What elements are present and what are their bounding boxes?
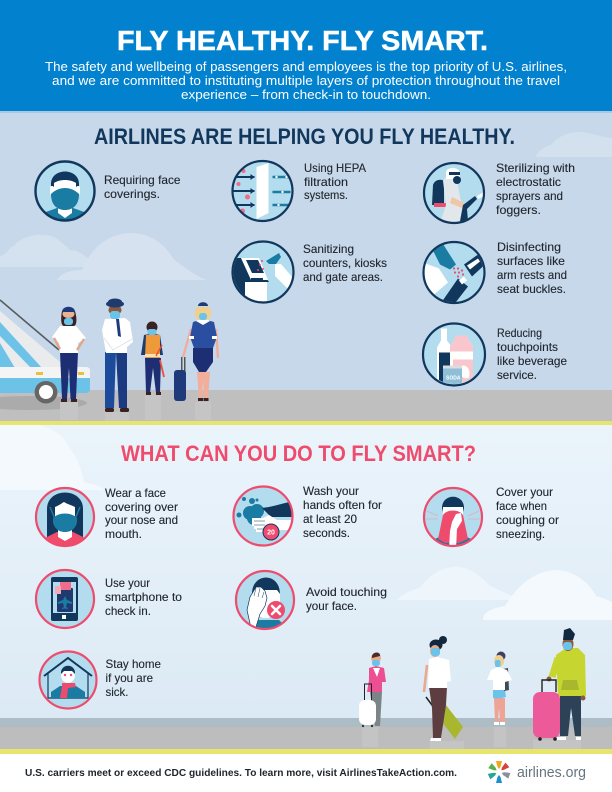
text: cover your face: Cover your: [496, 485, 553, 499]
icon: sanitizing kiosk: [232, 242, 294, 304]
icon: wash hands: [232, 486, 294, 546]
text: stay home: [106, 657, 161, 699]
icon: beverage service: SODA: [446, 376, 461, 382]
text: sanitizing: Sanitizing: [303, 242, 354, 256]
text: smartphone: smartphone to: [105, 590, 182, 604]
text: sterilizing: electrostatic: [496, 175, 561, 189]
text: stay home: Stay home: [106, 657, 161, 671]
text: sanitizing: and gate areas.: [303, 270, 383, 284]
heading: fly smart: WHAT CAN YOU DO TO FLY SMART?: [121, 441, 476, 466]
text: reducing: Reducing: [497, 326, 542, 340]
text: sanitizing: [303, 242, 387, 284]
text: reducing: service.: [497, 368, 537, 382]
text: reducing: touchpoints: [497, 340, 558, 354]
intro text: The safety and wellbeing of passengers and employees is the top priority of U.S. airlines,: [45, 59, 567, 74]
text: disinfecting: seat buckles.: [497, 282, 566, 296]
text: wash hands: at least 20: [303, 512, 357, 526]
text: wash hands: Wash your: [303, 484, 359, 498]
text: wear a face covering: mouth.: [105, 527, 142, 541]
text: smartphone: check in.: [105, 604, 151, 618]
text: wear a face covering: your nose and: [105, 513, 178, 527]
text: cover your face: coughing or: [496, 513, 559, 527]
panel: header: [0, 0, 612, 111]
person: male pilot: [102, 298, 133, 421]
text: HEPA: filtration: [304, 175, 348, 189]
person: flight attendant with suitcase: [174, 302, 218, 420]
text: wear a face covering: covering over: [105, 500, 178, 514]
person: female pilot: [52, 307, 86, 420]
text: disinfecting: Disinfecting: [497, 240, 561, 254]
badge: x mark: [267, 601, 285, 619]
panel: what you can do section background: [0, 425, 612, 754]
logo: airlines.org mark: [488, 761, 510, 783]
text: reducing: like beverage: [497, 354, 567, 368]
text: disinfecting: [497, 240, 567, 296]
text: sterilizing: foggers.: [496, 203, 541, 217]
text: requiring face coverings: coverings.: [104, 187, 160, 201]
text: wash hands: seconds.: [303, 526, 350, 540]
icon: stay home: [38, 650, 98, 710]
text: HEPA: Using HEPA: [304, 161, 366, 175]
text: cover your face: [496, 485, 559, 541]
icon: disinfecting seat buckle: [423, 242, 488, 304]
icon: wear face covering: [35, 487, 95, 549]
intro text: and we are committed to instituting multiple layers of protection throughout the travel: [52, 73, 560, 88]
icon: avoid touching face: [235, 570, 295, 632]
badge: 20 seconds: 20: [267, 530, 275, 536]
text: avoid touching: your face.: [306, 599, 357, 613]
intro text: experience – from check-in to touchdown.: [181, 87, 431, 102]
text: requiring face coverings: [104, 173, 181, 201]
text: sterilizing: sprayers and: [496, 189, 563, 203]
icon: beverage service: [423, 324, 485, 386]
icon: HEPA filter: [232, 161, 292, 221]
text: disinfecting: surfaces like: [497, 254, 565, 268]
logo: airlines.org wordmark: airlines.org: [517, 764, 586, 781]
intro text: [45, 59, 567, 102]
text: sanitizing: counters, kiosks: [303, 256, 387, 270]
text: disinfecting: arm rests and: [497, 268, 567, 282]
panel: airlines section background: [0, 111, 612, 425]
heading: airlines: AIRLINES ARE HELPING YOU FLY HEALTHY.: [94, 124, 515, 149]
text: reducing: [497, 326, 567, 382]
text: wear a face covering: [105, 486, 178, 541]
icon: smartphone check-in: [35, 569, 95, 629]
panel: footer: [0, 754, 612, 792]
person: boy with white suitcase: [359, 652, 386, 747]
icon: electrostatic sprayer: [424, 163, 486, 223]
person: girl with backpack: [487, 652, 512, 747]
text: avoid touching: Avoid touching: [306, 585, 387, 599]
icon: face covering: [35, 162, 95, 221]
text: smartphone: Use your: [105, 576, 150, 590]
footer text: U.S. carriers meet or exceed CDC guidelines. To learn more, visit AirlinesTakeAction.com.: [25, 767, 457, 779]
text: cover your face: face when: [496, 499, 547, 513]
text: avoid touching: [306, 585, 387, 613]
icon: cover cough: [423, 487, 483, 549]
text: HEPA: systems.: [304, 188, 348, 202]
title: FLY HEALTHY. FLY SMART.: [117, 25, 488, 56]
text: requiring face coverings: Requiring face: [104, 173, 181, 187]
text: sterilizing: [496, 161, 575, 217]
text: smartphone: [105, 576, 182, 618]
person: woman with green suitcase: [424, 636, 464, 749]
person: ground crew with vest: [141, 322, 164, 420]
text: sterilizing: Sterilizing with: [496, 161, 575, 175]
text: wash hands: [303, 484, 382, 540]
text: stay home: sick.: [106, 685, 128, 699]
illustration: airport stairs truck: [0, 300, 90, 410]
person: man with pink suitcase: [533, 628, 586, 749]
text: cover your face: sneezing.: [496, 527, 545, 541]
text: wash hands: hands often for: [303, 498, 382, 512]
text: stay home: if you are: [106, 671, 153, 685]
text: wear a face covering: Wear a face: [105, 486, 166, 500]
text: HEPA: [304, 161, 366, 202]
